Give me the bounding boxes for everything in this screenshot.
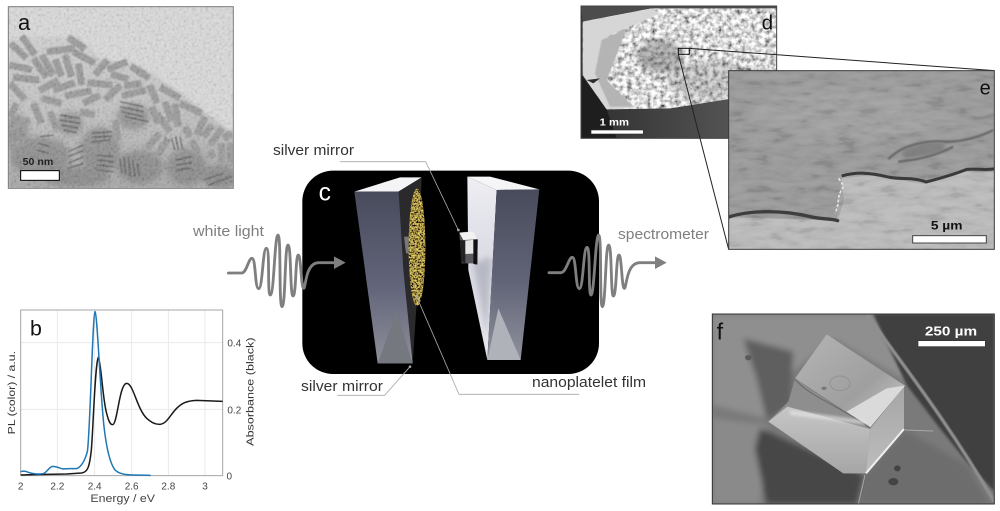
axis tick labels: 2 <box>18 481 24 492</box>
label a: a <box>18 10 31 35</box>
label d: d <box>762 11 773 34</box>
absorbance curve (black) <box>21 357 223 475</box>
scale bar: 50 nm <box>21 157 59 180</box>
axis tick labels: 2.2 <box>50 481 65 492</box>
label f: f <box>717 318 724 344</box>
label: top silver mirror: silver mirror <box>273 143 354 159</box>
label: white light: white light <box>192 224 264 240</box>
leader dots <box>409 229 460 368</box>
leader lines <box>337 162 579 395</box>
label: bottom silver mirror: silver mirror <box>301 379 383 395</box>
label e: e <box>980 77 991 99</box>
label: spectrometer: spectrometer <box>618 227 709 243</box>
panel e: SEM close-up of film edge <box>729 71 994 249</box>
panel c: microcavity schematic <box>302 162 599 395</box>
axis tick labels <box>18 338 242 492</box>
axis tick labels: 0.4 <box>227 338 242 349</box>
scale bar: 5 µm: 5 µm <box>931 220 962 233</box>
axis tick labels: 2.6 <box>125 481 139 492</box>
label c: c <box>319 180 331 207</box>
x axis title: Energy / eV <box>90 493 156 505</box>
PL curve (blue) <box>21 312 151 475</box>
arrow: incoming white light wave <box>228 235 346 307</box>
panel a: TEM image of nanoplatelets <box>5 7 237 188</box>
axis tick labels: 3 <box>202 481 208 492</box>
left prism with mirror <box>354 177 422 363</box>
crystal body <box>768 334 905 473</box>
scale bar: 5 µm <box>913 220 986 243</box>
arrow: outgoing spectrometer wave <box>549 235 667 307</box>
scale bar: 250 µm <box>918 324 985 347</box>
right axis title: Absorbance (black) <box>246 337 257 446</box>
panel d: SEM overview of film <box>581 6 994 249</box>
label b: b <box>30 316 42 340</box>
axis tick labels: 0.2 <box>227 405 242 416</box>
axis tick labels: 0 <box>227 472 233 483</box>
scale bar: 250 µm: 250 µm <box>925 324 977 339</box>
right prism with mirror spot <box>459 177 539 360</box>
zoom connector lines <box>678 48 994 249</box>
axis tick labels: 2.4 <box>88 481 102 492</box>
label: nanoplatelet film: nanoplatelet film <box>532 375 646 391</box>
zoom rectangle <box>678 48 689 54</box>
scale bar: 1 mm <box>591 117 643 134</box>
scale bar: 50 nm: 50 nm <box>23 157 53 168</box>
panel b: PL and absorbance spectra chart <box>7 310 257 505</box>
gold nanoplatelet film disc <box>408 188 426 306</box>
panel f: SEM image of crystal <box>712 314 994 504</box>
left axis title: PL (color) / a.u. <box>7 351 18 434</box>
scale bar: 1 mm: 1 mm <box>600 117 629 128</box>
axis tick labels: 2.8 <box>161 481 176 492</box>
